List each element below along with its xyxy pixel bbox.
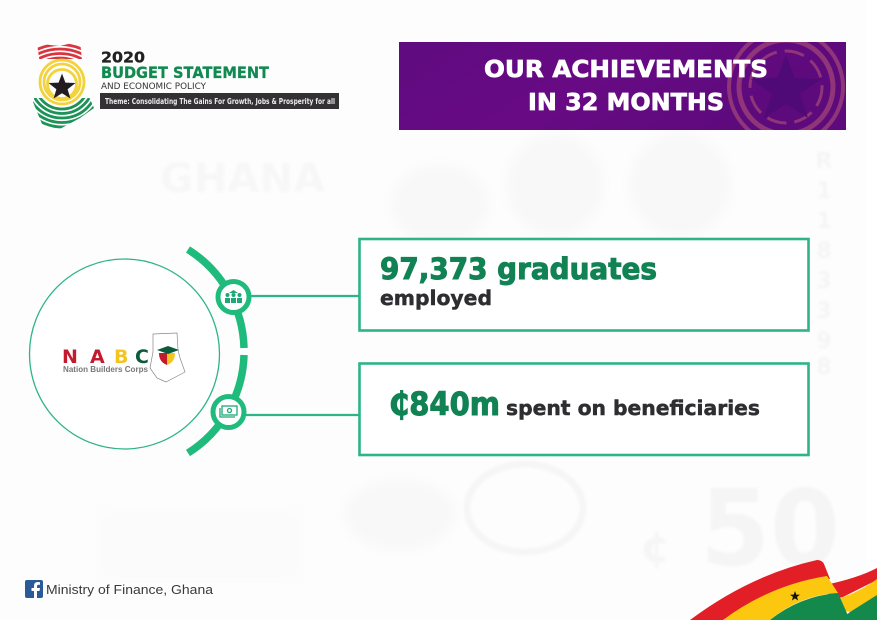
heading: 2020 budget statement: 2020 <box>101 48 145 66</box>
connector lines <box>240 296 359 415</box>
stat: 97,373 graduates: 97,373 graduates <box>380 252 657 286</box>
NABC lettering: A <box>90 346 105 368</box>
heading: 2020 budget statement <box>100 48 339 109</box>
background watermark: 1 <box>816 209 832 234</box>
background watermark: ¢ <box>640 522 671 573</box>
NABC lettering: B <box>114 346 128 368</box>
yellow rings <box>40 60 84 104</box>
panel: NABC logo circle: Nation Builders Corps <box>63 364 148 374</box>
icon: Ghana outline with cap <box>150 333 185 382</box>
logo: Ghana map of rings with star <box>33 44 94 128</box>
panel: purple title banner <box>399 42 846 130</box>
background watermark: 8 <box>816 239 832 264</box>
background watermark: R <box>816 149 833 174</box>
panel: NABC logo circle <box>30 259 220 449</box>
flag: Ghana flag ribbon <box>690 560 877 620</box>
background watermark: 8 <box>816 355 832 380</box>
icon: facebook <box>25 580 43 598</box>
right fold <box>825 568 877 620</box>
background watermark: 50 <box>700 468 840 590</box>
icon: graduates node <box>218 282 249 312</box>
red rings <box>38 44 82 59</box>
arc: lower green arc <box>188 355 244 453</box>
title text: OUR ACHIEVEMENTS <box>484 57 768 83</box>
arc: upper green arc <box>188 250 244 348</box>
background watermark: 3 <box>816 269 832 294</box>
background watermark: 1 <box>816 179 832 204</box>
heading: 2020 budget statement: Theme: Consolidating The Gains For Growth, Jobs & Prosperity for all <box>105 97 335 106</box>
stat: 840m: ₵840m <box>389 385 500 423</box>
label: employed: employed <box>380 286 492 310</box>
panel: graduates employed <box>360 239 808 330</box>
footer: Facebook credit: Ministry of Finance, Ghana <box>46 582 214 597</box>
background watermark: 3 <box>816 299 832 324</box>
icon: flag star <box>790 591 800 600</box>
NABC lettering <box>62 346 149 368</box>
background watermark: 9 <box>816 329 832 354</box>
icon: faded ring emblem <box>727 42 845 130</box>
background watermark: GHANA <box>160 156 325 202</box>
heading: 2020 budget statement: AND ECONOMIC POLICY <box>101 82 207 92</box>
NABC lettering: C <box>135 346 149 368</box>
NABC lettering: N <box>62 346 78 368</box>
icon: money node <box>213 396 244 428</box>
main ribbon <box>690 560 850 620</box>
icon: black star <box>48 74 76 98</box>
title text: IN 32 MONTHS <box>528 90 724 116</box>
green rings <box>33 98 94 128</box>
heading: 2020 budget statement: BUDGET STATEMENT <box>101 63 269 82</box>
title text <box>484 57 768 116</box>
footer: Facebook credit <box>25 580 214 598</box>
panel: money spent <box>360 364 808 455</box>
label: spent on beneficiaries: spent on beneficiaries <box>506 396 760 420</box>
